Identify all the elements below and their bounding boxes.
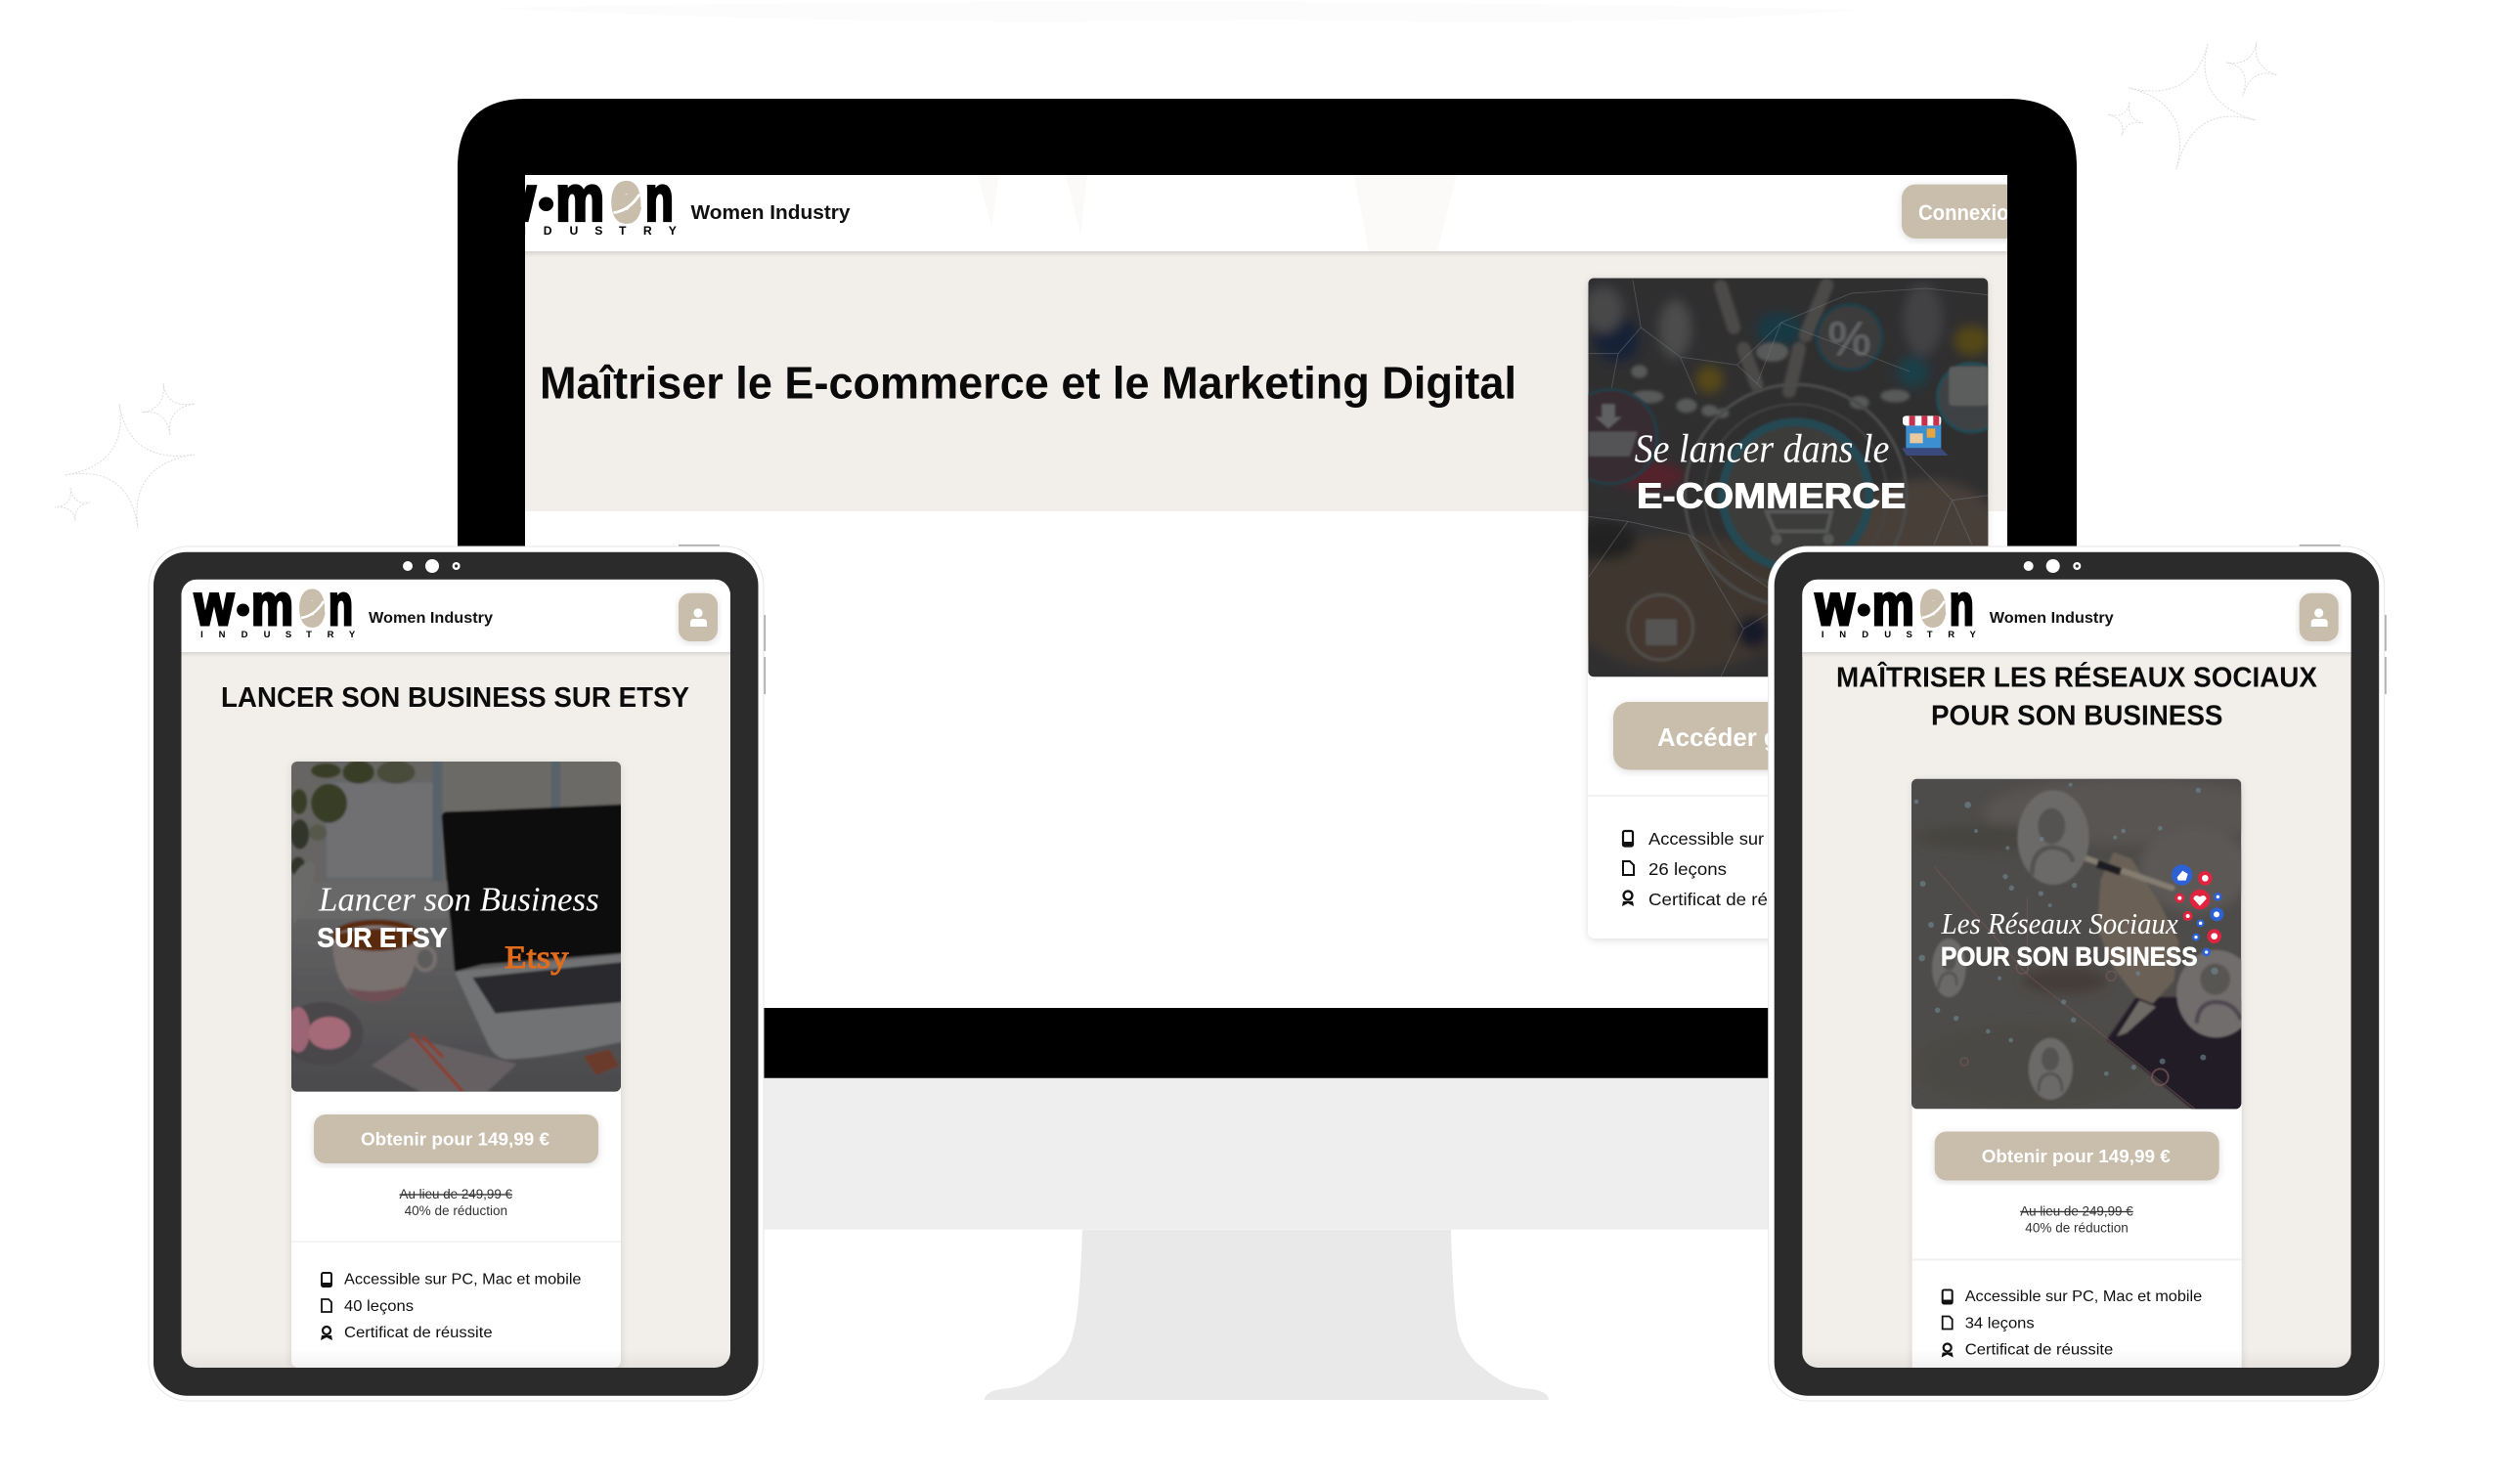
sparkles top right — [2108, 42, 2277, 169]
access button — [1611, 702, 1768, 774]
icon: document — [1623, 861, 1634, 875]
coffee cup — [332, 920, 435, 1002]
image title bold: SUR ETSY — [317, 922, 448, 952]
logo: m — [251, 573, 293, 637]
course card etsy — [282, 760, 624, 1368]
feature list: Certificat de réussite — [1965, 1342, 2113, 1359]
course image reseaux — [1911, 779, 2276, 1112]
course title: LANCER SON BUSINESS SUR ETSY — [221, 682, 689, 714]
tablet side buttons — [2300, 546, 2386, 694]
login button: Connexion — [1918, 200, 2021, 225]
feature list: Accessible sur PC, Mac et mobile — [344, 1272, 582, 1288]
discount: 40% de réduction — [405, 1203, 507, 1218]
icon: phone — [1623, 831, 1633, 847]
image title script: Les Réseaux Sociaux — [1941, 907, 2178, 940]
monitor — [458, 99, 2077, 1400]
icon: certificate — [321, 1327, 332, 1340]
header bar — [182, 579, 730, 655]
feature list: Certificat de réussite — [1648, 890, 1816, 909]
etsy wordmark: Etsy — [505, 940, 569, 976]
access button: Accéder gratuitement — [1657, 722, 1916, 752]
course title: POUR SON BUSINESS — [1931, 701, 2222, 732]
image title script: Se lancer dans le — [1635, 427, 1889, 472]
plate of meringues — [291, 1002, 363, 1054]
logo — [525, 180, 677, 235]
buy button: Obtenir pour 149,99 € — [361, 1130, 549, 1150]
tablet screen — [182, 572, 730, 1368]
image title bold: POUR SON BUSINESS — [1941, 941, 2198, 971]
discount: 40% de réduction — [2025, 1220, 2129, 1236]
tablet bezel — [1775, 552, 2379, 1396]
login button — [1899, 184, 2007, 242]
logo — [1815, 572, 1977, 640]
logo: m — [1872, 573, 1914, 637]
tablet right — [1769, 546, 2386, 1401]
logo: n — [1950, 573, 1974, 637]
course image e-commerce — [1588, 278, 1989, 677]
feature list — [1942, 1288, 2202, 1359]
course image etsy — [282, 760, 624, 1095]
icon: online shop — [1902, 415, 1949, 456]
feature list: Accessible sur PC, Mac et mobile — [1648, 829, 1915, 849]
icon: certificate — [1622, 892, 1634, 906]
hero title: Maîtriser le E-commerce et le Marketing Digital — [540, 358, 1516, 409]
course title: MAÎTRISER LES RÉSEAUX SOCIAUX — [1836, 663, 2317, 694]
logo: m — [555, 163, 604, 235]
background brush texture — [489, 1, 1858, 22]
image title script: Lancer son Business — [318, 881, 599, 919]
tablet halo — [1769, 546, 2385, 1401]
course card reseaux — [1911, 778, 2276, 1384]
plant — [290, 761, 415, 877]
buy button: Obtenir pour 149,99 € — [1982, 1147, 2171, 1166]
logo: INDUSTRY — [497, 224, 677, 238]
hero band — [525, 252, 2007, 511]
hand and pen — [2085, 852, 2244, 1112]
brand name: Women Industry — [690, 202, 851, 224]
image title bold: E-COMMERCE — [1637, 475, 1906, 515]
sparkles left — [55, 383, 195, 528]
old price: Au lieu de 249,99 € — [399, 1187, 512, 1201]
reaction icons — [2172, 864, 2223, 956]
logo: w — [489, 163, 536, 235]
percent badge — [1817, 305, 1882, 370]
brand name: Women Industry — [1990, 610, 2114, 627]
logo: w — [194, 573, 234, 637]
notebook and pens — [372, 1033, 516, 1092]
tablet halo — [149, 546, 764, 1401]
logo: w — [1815, 573, 1855, 637]
logo: INDUSTRY — [1822, 630, 1977, 640]
profile button — [2300, 593, 2339, 641]
monitor black frame — [458, 99, 2077, 1078]
camera dots — [2024, 559, 2081, 573]
laptop base — [455, 954, 624, 1059]
icon: phone — [322, 1273, 331, 1287]
tablet side buttons — [679, 546, 765, 694]
profile button — [679, 593, 718, 641]
monitor grey chin — [458, 1078, 2077, 1230]
feature list — [1621, 829, 1768, 906]
logo: n — [645, 163, 674, 235]
logo: n — [329, 573, 353, 637]
tablet screen — [1802, 572, 2351, 1384]
percent badge: % — [1827, 311, 1871, 366]
logo: e — [1921, 572, 1945, 636]
laptop screen — [442, 805, 624, 972]
buy button — [314, 1114, 598, 1163]
logo: INDUSTRY — [200, 630, 356, 640]
monitor stand — [985, 1230, 1549, 1400]
logo — [193, 589, 355, 637]
header bar — [525, 180, 2007, 255]
course card e-commerce — [1562, 278, 2006, 938]
monitor screen — [489, 162, 2039, 1008]
old price: Au lieu de 249,99 € — [2020, 1204, 2133, 1218]
icon: phone — [1943, 1290, 1953, 1304]
icon: document — [322, 1299, 331, 1312]
feature list: 40 leçons — [344, 1298, 414, 1315]
profile icons — [1932, 790, 2256, 1100]
tablet bezel — [154, 552, 759, 1396]
course title — [1836, 663, 2317, 732]
feature list — [321, 1272, 582, 1341]
logo: e — [300, 572, 324, 636]
logo: e — [612, 162, 639, 234]
feature list: 34 leçons — [1965, 1316, 2035, 1332]
feature list: 26 leçons — [1648, 859, 1727, 879]
icon: document — [1943, 1316, 1953, 1330]
icon: certificate — [1942, 1343, 1954, 1357]
feature list: Accessible sur PC, Mac et mobile — [1965, 1288, 2202, 1305]
buy button — [1935, 1132, 2219, 1181]
tablet left — [149, 546, 765, 1401]
camera dots — [403, 559, 461, 573]
header bar — [1802, 572, 2351, 657]
brand name: Women Industry — [369, 610, 493, 627]
feature list: Certificat de réussite — [344, 1325, 493, 1341]
